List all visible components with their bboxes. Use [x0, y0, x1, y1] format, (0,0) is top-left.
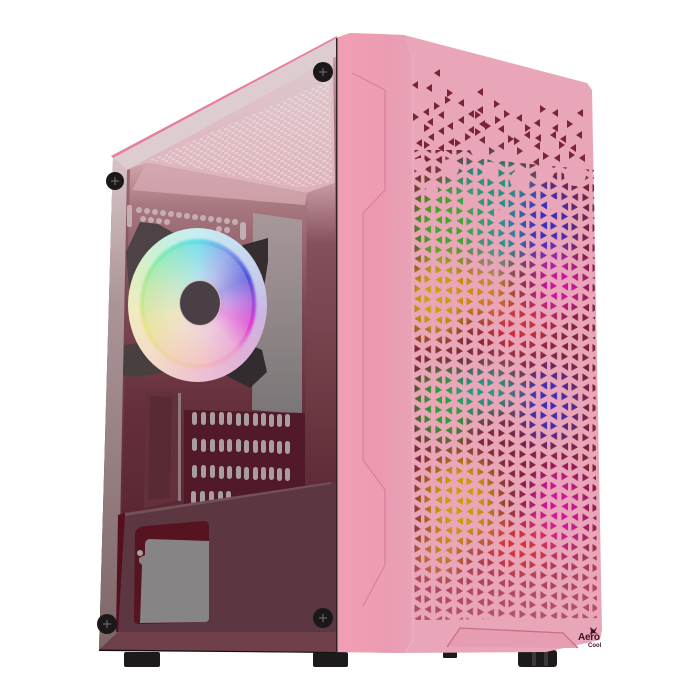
shadow left of shroud	[116, 513, 125, 632]
glass black outline	[99, 650, 337, 653]
thumb screw bottom left	[97, 614, 117, 634]
back wall base	[99, 38, 337, 653]
right body of the case	[336, 33, 610, 653]
bottom frame	[99, 632, 337, 652]
ceiling ventilation holes	[150, 80, 332, 188]
ceiling with mesh	[127, 56, 335, 193]
strip recess outline	[352, 73, 385, 606]
fan ring and blades	[120, 220, 280, 390]
lower left compartment	[144, 391, 181, 508]
thumb screw top left	[106, 172, 124, 190]
wall pink upper glow	[132, 163, 307, 205]
front mesh with RGB light	[412, 69, 597, 620]
shroud top edge	[125, 482, 331, 516]
back wall panel	[122, 163, 307, 513]
PSU grey area	[139, 539, 209, 623]
PSU cutout	[134, 521, 209, 624]
grey drive block	[252, 213, 302, 414]
front panel	[336, 33, 602, 653]
tempered glass side panel	[99, 36, 338, 653]
pink top edge	[111, 36, 337, 158]
RGB fan	[120, 220, 280, 390]
right inner side wall	[305, 183, 337, 487]
logo: Cool	[588, 643, 602, 649]
PSU shroud	[118, 482, 337, 632]
expansion slot bays	[184, 410, 305, 505]
strip recess	[363, 190, 385, 490]
case feet	[124, 650, 557, 667]
bottom plate outline	[447, 628, 578, 648]
side strip	[336, 33, 412, 653]
logo: Aero	[578, 632, 600, 643]
top glass strip	[113, 38, 337, 170]
pink PC case illustration	[97, 33, 602, 667]
fan frame corners	[123, 222, 268, 388]
left glass strip	[99, 158, 127, 650]
thumb screw bottom right	[313, 608, 333, 628]
logo	[578, 627, 602, 649]
strip edge shading	[404, 35, 414, 653]
top vent holes	[127, 205, 246, 240]
thumb screw top right	[313, 62, 333, 82]
